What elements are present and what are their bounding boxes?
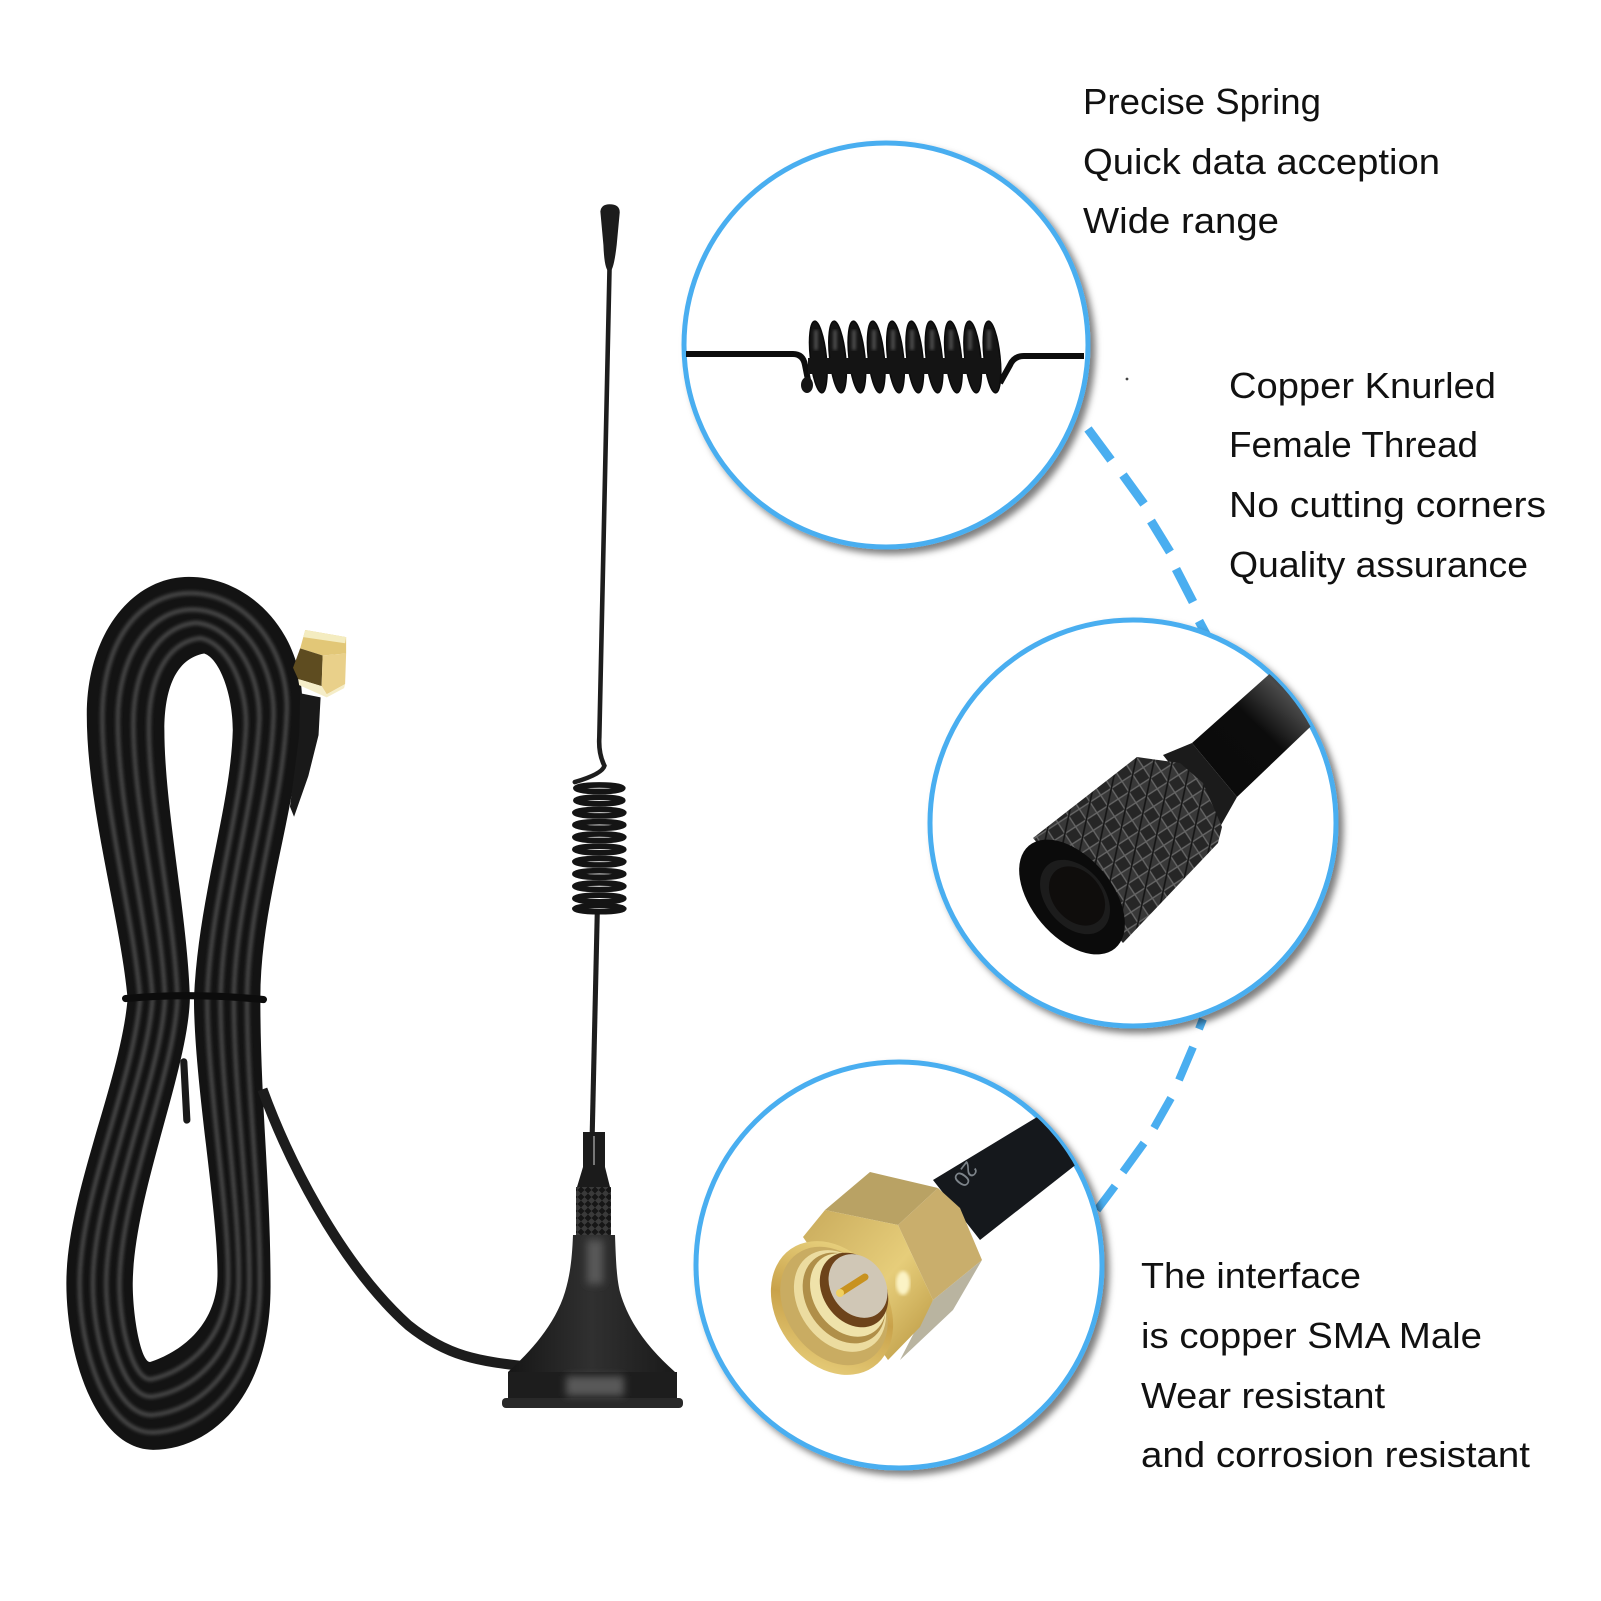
text block: interface features: Wear resistant — [1141, 1375, 1385, 1416]
icon: knurled female connector — [1019, 674, 1310, 954]
icon: SMA male connector — [770, 1117, 1075, 1375]
speck — [1126, 378, 1128, 380]
text block: thread features: Quality assurance — [1229, 544, 1528, 585]
text block: spring features: Precise Spring — [1083, 81, 1321, 122]
text block: thread features: Copper Knurled — [1229, 365, 1496, 406]
dashed connector: thread circle to SMA circle — [1097, 1019, 1203, 1210]
text block: spring features — [1083, 81, 1440, 241]
text block: thread features: Female Thread — [1229, 424, 1478, 465]
text block: interface features: The interface — [1141, 1255, 1361, 1296]
icon: spring close-up — [686, 320, 1084, 394]
panel: SMA male detail circle — [696, 1062, 1102, 1468]
dashed connector: spring circle to thread circle — [1088, 429, 1207, 636]
icon: SMA male connector: 20 — [948, 1157, 983, 1192]
text block: spring features: Wide range — [1083, 200, 1279, 241]
panel: knurled thread detail circle — [930, 620, 1336, 1026]
text block: spring features: Quick data acception — [1083, 141, 1440, 182]
text block: thread features: No cutting corners — [1229, 484, 1546, 525]
product: cable coil and magnetic antenna — [66, 204, 624, 1450]
text block: interface features: and corrosion resistant — [1141, 1434, 1530, 1475]
small SMA connector — [290, 630, 346, 817]
cable coil — [66, 577, 302, 1450]
text block: interface features — [1141, 1255, 1530, 1475]
cable tie — [126, 996, 263, 1000]
antenna whip — [575, 204, 620, 1135]
magnetic base — [502, 1132, 683, 1408]
free cable to base — [262, 1089, 531, 1367]
text block: interface features: is copper SMA Male — [1141, 1315, 1482, 1356]
antenna spring — [575, 785, 624, 912]
text block: thread features — [1229, 365, 1546, 585]
panel: spring detail circle — [684, 143, 1088, 547]
